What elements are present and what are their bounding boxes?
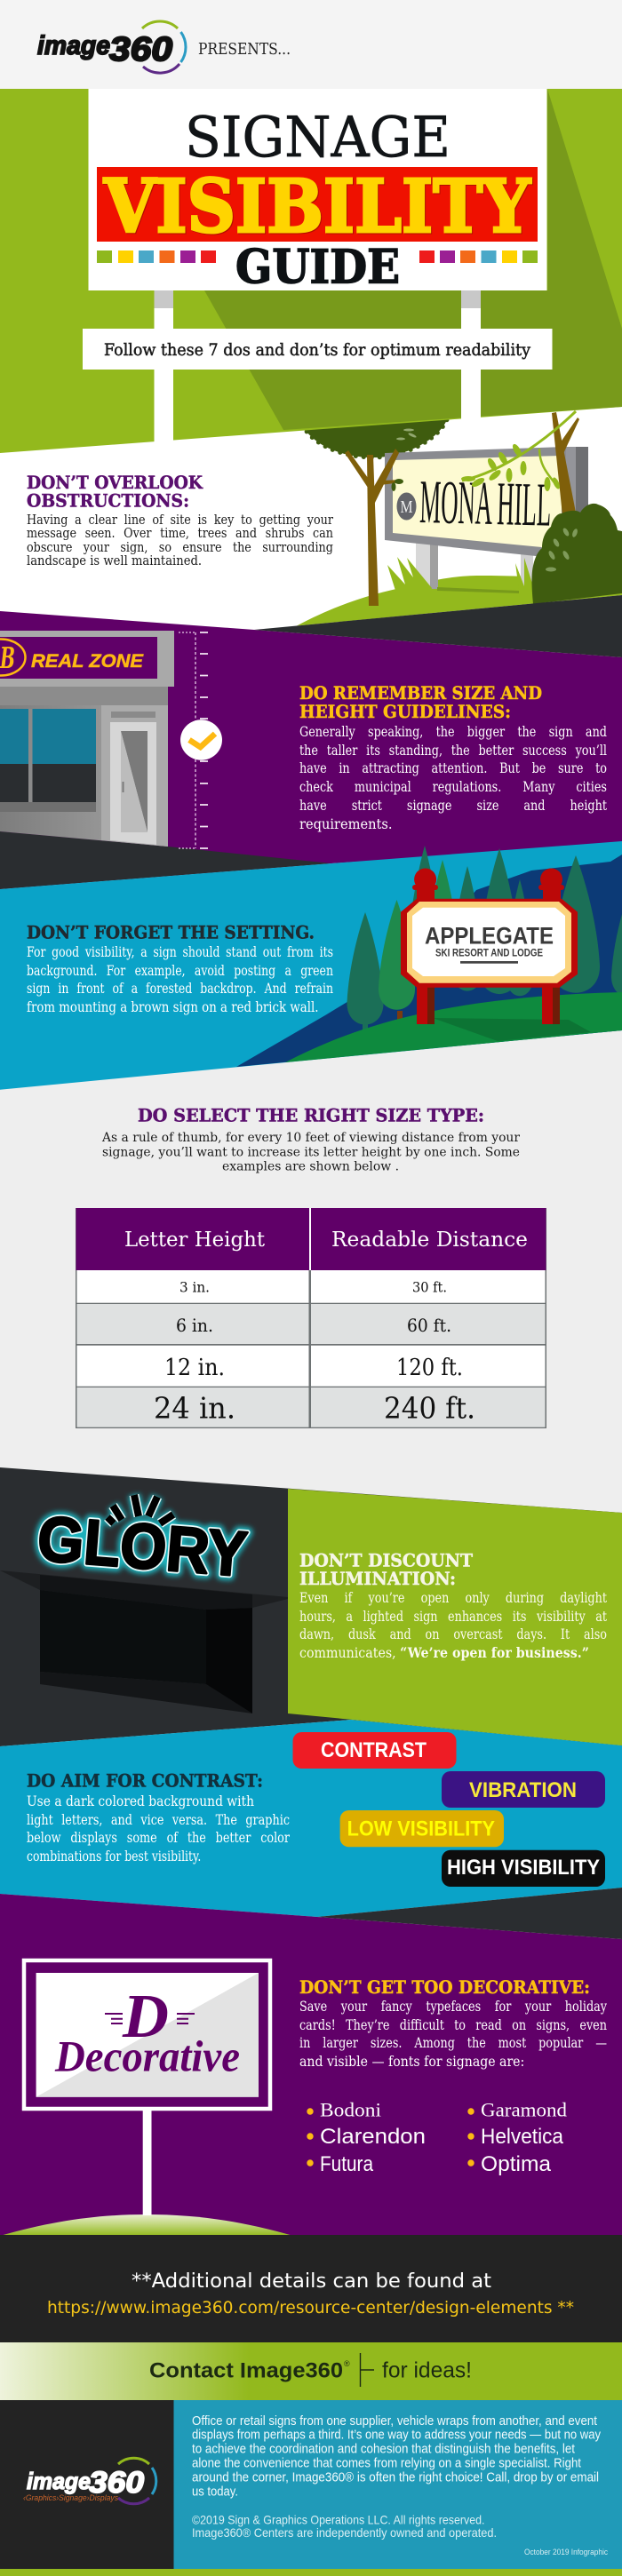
row: 6 in: 60 ft.: [407, 1316, 451, 1336]
table: letter height vs readable distance: [76, 1208, 546, 1428]
colour squares left: [97, 250, 216, 263]
body text: size and height: have strict signage size and height: [299, 797, 607, 814]
title word: guide: GUIDE: [235, 240, 400, 295]
heading: do remember size and height guidelines: [299, 682, 542, 722]
decorative lettering: [54, 1983, 240, 2081]
table header: Readable Distance: [331, 1228, 528, 1252]
body text: setting: sign in front of a forested backdrop. And refrain: [27, 980, 333, 997]
title word: signage: SIGNAGE: [185, 105, 451, 170]
footer logo: 360: [89, 2466, 144, 2500]
heading: do remember size and height guidelines: HEIGHT GUIDELINES:: [299, 701, 511, 722]
check icon: [180, 720, 222, 760]
storefront sign: REAL ZONE: [31, 651, 144, 672]
body text: contrast: [27, 1793, 290, 1864]
row: 3 in: 3 in.: [179, 1278, 210, 1295]
sample: vibration: VIBRATION: [469, 1778, 577, 1802]
presents label: PRESENTS...: [198, 40, 291, 59]
body text: size and height: have in attracting attention. But be sure to: [299, 759, 607, 776]
tree trunk left: [345, 449, 403, 606]
hill: [285, 992, 622, 1062]
sample: contrast: [293, 1732, 457, 1769]
intro text: size type: examples are shown below .: [222, 1160, 399, 1174]
footer logo: [23, 2458, 156, 2504]
decorative lettering: Decorative: [54, 2031, 240, 2081]
additional details band: https://www.image360.com/resource-center/design-elements **: [47, 2298, 574, 2318]
intro text: size type: signage, you’ll want to increase its letter height by one inch. Some: [102, 1146, 520, 1160]
list of recommended fonts: Helvetica: [481, 2125, 564, 2149]
tree right with fork: [552, 412, 579, 515]
row: 24 in: 240 ft.: [384, 1391, 475, 1426]
body text: illumination: communicates, “We’re open for business.”: [299, 1644, 589, 1661]
sample: contrast: CONTRAST: [321, 1738, 427, 1762]
section: dark illumination panel: [0, 1467, 622, 1746]
body text: setting: background. For example, avoid posting a green: [27, 962, 333, 979]
storefront sign: B: [0, 640, 15, 675]
sign board: APPLEGATE: [425, 922, 554, 949]
wall: [0, 684, 168, 847]
row: 6 in: [76, 1304, 546, 1344]
body text: illumination: hours, a lighted sign enhances its visibility at: [299, 1608, 607, 1625]
illustration: storefront with Real Zone sign: [0, 631, 174, 847]
shrub: [531, 504, 622, 604]
body text: setting: For good visibility, a sign should stand out from its: [27, 943, 333, 960]
subtitle banner: Follow these 7 dos and don’ts for optimum readability: [104, 341, 531, 360]
sample: low visibility: [340, 1810, 504, 1847]
body text: decorative: Save your fancy typefaces for your holiday: [299, 1998, 607, 2015]
list of recommended fonts: [307, 2099, 567, 2176]
colour samples: [293, 1732, 605, 1887]
copyright text: Image360® Centers are independently owned and operated.: [192, 2525, 497, 2540]
body text: obstructions: landscape is well maintained.: [27, 554, 202, 568]
subtitle banner: [83, 329, 553, 370]
footer green strip: [0, 2569, 622, 2576]
illustration: dark storefront window: [0, 1570, 288, 1713]
about text: [192, 2414, 602, 2500]
illustration: decorative sign: [0, 1960, 293, 2236]
copyright text: ©2019 Sign & Graphics Operations LLC. All rights reserved.: [192, 2513, 485, 2527]
bracket icon: [361, 2353, 374, 2387]
intro text: size type: [101, 1131, 520, 1174]
section: blue contrast panel: [0, 1720, 622, 1917]
title word: visibility on red panel: VISIBILITY: [104, 165, 532, 250]
date note: October 2019 Infographic: [524, 2548, 608, 2556]
body text: contrast: below displays some of the better color: [27, 1829, 290, 1846]
sign legs: [416, 542, 533, 595]
sign text: [396, 468, 552, 540]
row: 6 in: 6 in.: [176, 1316, 213, 1336]
hill: [0, 2214, 293, 2236]
row: 3 in: 30 ft.: [412, 1278, 447, 1295]
section: purple decorative panel: [0, 1888, 622, 2236]
logo: image360: [37, 21, 186, 73]
illuminated sign: GLORY: [35, 1495, 250, 1591]
list of recommended fonts: Optima: [481, 2152, 552, 2176]
body text: decorative: and visible — fonts for signage are:: [299, 2053, 524, 2070]
grass tufts: [387, 557, 533, 597]
body text: illumination: dawn, dusk and on overcast days. It also: [299, 1626, 607, 1642]
colour squares right: [419, 250, 538, 263]
body text: size and height: requirements.: [299, 815, 392, 832]
copyright text: [192, 2513, 497, 2540]
about text: us today.: [192, 2485, 238, 2500]
hero green background with shadow: [0, 89, 622, 457]
body text: obstructions: Having a clear line of site is key to getting your: [27, 513, 333, 528]
panel: [36, 1973, 259, 2097]
post: [143, 2111, 151, 2215]
sign finials: [412, 869, 564, 901]
contact call-to-action bar: [0, 2342, 622, 2400]
heading: do select the right size type: DO SELECT THE RIGHT SIZE TYPE:: [138, 1105, 484, 1126]
about text: around the corner, Image360® is often the right choice! Call, drop by or email: [192, 2471, 599, 2485]
heading: don't discount illumination: DON’T DISCOUNT: [299, 1549, 473, 1570]
section: blue setting panel: [0, 841, 622, 1090]
storefront sign: [0, 631, 174, 687]
sign board: [401, 899, 578, 988]
heading: don't overlook obstructions: OBSTRUCTIONS:: [27, 490, 189, 512]
heading: don't forget the setting: DON’T FORGET THE SETTING.: [27, 922, 315, 943]
hill: [297, 576, 622, 625]
list of recommended fonts: Futura: [320, 2152, 374, 2176]
row: 3 in: [76, 1270, 546, 1303]
body text: illumination: Even if you’re open only during daylight: [299, 1589, 607, 1606]
body text: obstructions: obscure your sign, so ensure the surrounding: [27, 541, 333, 555]
body text: decorative: cards! They’re difficult to read on signs, even: [299, 2016, 607, 2033]
body text: size and height: Generally speaking, the bigger the sign and: [299, 723, 607, 740]
door: [101, 705, 168, 847]
body text: setting: from mounting a brown sign on a red brick wall.: [27, 998, 319, 1015]
sign posts: [417, 986, 560, 1024]
about text: Office or retail signs from one supplier, vehicle wraps from another, and event: [192, 2414, 597, 2429]
sign frame: [385, 447, 588, 556]
sample: high visibility: HIGH VISIBILITY: [447, 1856, 600, 1880]
mountain: [236, 855, 622, 1067]
section: green illumination panel: [288, 1489, 622, 1745]
footer about panel: [174, 2400, 622, 2569]
sample: vibration: [442, 1771, 605, 1808]
additional details band: **Additional details can be found at: [132, 2270, 491, 2293]
body text: size and height: check municipal regulations. Many cities: [299, 778, 607, 795]
body text: obstructions: [27, 513, 333, 568]
body text: decorative: [299, 1998, 607, 2070]
row: 24 in: [76, 1387, 546, 1427]
list of recommended fonts: Bodoni: [320, 2099, 381, 2121]
header band: [0, 0, 622, 89]
row: 12 in: 12 in.: [164, 1355, 225, 1381]
body text: contrast: Use a dark colored background with: [27, 1793, 254, 1809]
frame: [24, 1960, 270, 2109]
section: purple size and height panel: [0, 595, 622, 889]
body text: size and height: the taller its standing, the better success you’ll: [299, 742, 607, 759]
heading: do remember size and height guidelines: DO REMEMBER SIZE AND: [299, 682, 542, 704]
illustration: Applegate ski resort sign: [236, 846, 622, 1067]
body text: size and height: [299, 723, 607, 832]
billboard posts: [155, 290, 481, 457]
table header: Letter Height: [124, 1228, 266, 1252]
decorative lettering: D: [122, 1983, 169, 2051]
footer logo panel: [0, 2400, 174, 2569]
heading: don't discount illumination: ILLUMINATION:: [299, 1568, 456, 1589]
heading: don't get too decorative: DON’T GET TOO DECORATIVE:: [299, 1976, 590, 1998]
about text: to achieve the coordination and cohesion that distinguish the benefits, let: [192, 2443, 575, 2457]
heading: don't overlook obstructions: [27, 472, 203, 512]
tree crown behind the hero band: [299, 417, 448, 457]
black lettering: GLORY: [35, 1503, 250, 1591]
sign text: M: [400, 497, 413, 517]
body text: contrast: combinations for best visibility.: [27, 1848, 201, 1864]
white outline: GLORY: [35, 1503, 250, 1591]
body text: decorative: in larger sizes. Among the most popular —: [299, 2034, 607, 2051]
row: 12 in: 120 ft.: [396, 1355, 463, 1381]
list of recommended fonts: Garamond: [481, 2099, 567, 2121]
footer logo: image: [27, 2468, 91, 2494]
contact call-to-action bar: ®: [344, 2359, 350, 2368]
heading: do aim for contrast: DO AIM FOR CONTRAST:: [27, 1770, 263, 1792]
body text: setting: [27, 943, 333, 1015]
contact call-to-action bar: for ideas!: [382, 2358, 472, 2383]
intro text: size type: As a rule of thumb, for every 10 feet of viewing distance from your: [101, 1131, 520, 1145]
footer logo: ‹Graphics›Signage›Displays: [23, 2493, 118, 2503]
heading: don't overlook obstructions: DON’T OVERLOOK: [27, 472, 203, 493]
section: white background shape: [0, 400, 622, 630]
window: [0, 709, 96, 812]
list of recommended fonts: Clarendon: [320, 2125, 426, 2149]
height ruler with check mark: [179, 632, 222, 848]
logo: image360: image: [37, 31, 110, 60]
body text: contrast: light letters, and vice versa. The graphic: [27, 1811, 290, 1828]
vine with leaves: [461, 411, 576, 491]
title word: visibility on red panel: VISIBILITY: [103, 164, 531, 250]
illustration: obstructed Mona Hill sign: [297, 411, 622, 625]
billboard: title sign: [89, 89, 547, 295]
table header: [76, 1208, 546, 1270]
logo: image360: 360: [109, 31, 172, 68]
evergreen trees: [347, 846, 622, 1032]
additional details band: [0, 2235, 622, 2342]
heading: don't discount illumination: [299, 1549, 473, 1589]
sample: low visibility: LOW VISIBILITY: [347, 1817, 495, 1841]
contact call-to-action bar: Contact Image360: [149, 2359, 343, 2383]
sign board: SKI RESORT AND LODGE: [435, 949, 543, 959]
sample: high visibility: [442, 1850, 605, 1887]
body text: obstructions: message seen. Over time, trees and shrubs can: [27, 527, 333, 541]
row: 24 in: 24 in.: [154, 1391, 235, 1426]
about text: alone the convenience that comes from relying on a single specialist. Right: [192, 2457, 581, 2471]
body text: illumination: [299, 1589, 607, 1661]
row: 12 in: [76, 1346, 546, 1387]
teal halo: GLORY: [35, 1503, 250, 1591]
